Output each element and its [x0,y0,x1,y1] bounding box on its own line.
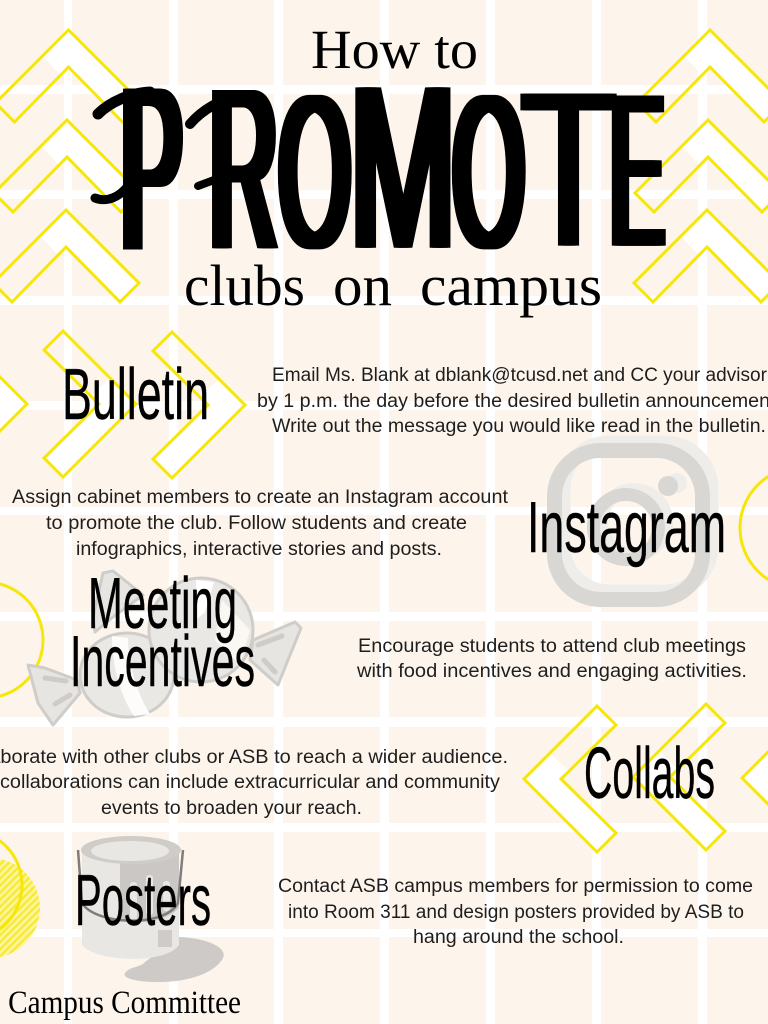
icon: right up chevrons [634,30,768,302]
label: Meeting Incentives [70,564,255,702]
icon: bottom left yellow circle [0,830,22,940]
text: collabs instructions [0,747,508,819]
text: instagram instructions: Assign cabinet members to create an Instagram account [12,487,509,508]
heading: How to: How to [311,19,478,80]
heading: PROMOTE: M [350,38,456,299]
heading: PROMOTE: O [453,51,525,295]
text: collabs instructions: events to broaden your reach. [101,798,362,819]
heading: PROMOTE: T [520,47,617,294]
text: posters instructions: into Room 311 and design posters provided by ASB to [288,902,744,923]
icon: left yellow circle [0,582,43,698]
text: instagram instructions: infographics, interactive stories and posts. [76,539,442,560]
label: Meeting Incentives: Incentives [70,622,255,702]
heading: clubs on campus: on [333,253,392,318]
text: bulletin instructions [257,365,768,437]
flourishes on the title letters [95,92,240,200]
text: posters instructions [278,876,753,948]
text: posters instructions: hang around the school. [413,927,624,948]
text: bulletin instructions: Write out the message you would like read in the bulletin. [272,416,766,437]
label: Bulletin: Bulletin [62,355,209,435]
text: meeting incentives instructions: Encourage students to attend club meetings [358,636,746,657]
icon: paint bucket [78,836,224,982]
heading: clubs on campus: clubs [184,253,305,318]
text: instagram instructions [12,487,509,560]
label: Posters: Posters [75,861,211,941]
text: meeting incentives instructions: with food incentives and engaging activities. [356,661,747,682]
icon: collabs left chevrons [524,704,768,852]
text: instagram instructions: to promote the club. Follow students and create [46,513,467,534]
text: posters instructions: Contact ASB campus members for permission to come [278,876,753,897]
text: bulletin instructions: by 1 p.m. the day before the desired bulletin announcement. [257,391,768,412]
icon: right yellow circle [740,467,768,589]
icon: hatched yellow circle [0,858,40,958]
icon: left up chevrons [0,30,142,302]
heading: PROMOTE: P [121,39,182,301]
icon: candy [28,571,301,725]
text: meeting incentives instructions [356,636,747,682]
text: collabs instructions: collaborations can include extracurricular and community [0,772,501,793]
icon: bulletin right chevrons [0,331,245,478]
heading: PROMOTE: O [279,51,351,295]
label: Meeting Incentives: Meeting [88,564,237,644]
heading: PROMOTE: E [610,49,664,294]
heading: PROMOTE [121,38,666,301]
heading: clubs on campus: campus [420,253,602,318]
heading: PROMOTE: R [210,41,277,299]
icon: instagram logo [554,443,711,600]
text: bulletin instructions: Email Ms. Blank at dblank@tcusd.net and CC your advisor [272,365,768,386]
heading: clubs on campus [184,253,602,318]
